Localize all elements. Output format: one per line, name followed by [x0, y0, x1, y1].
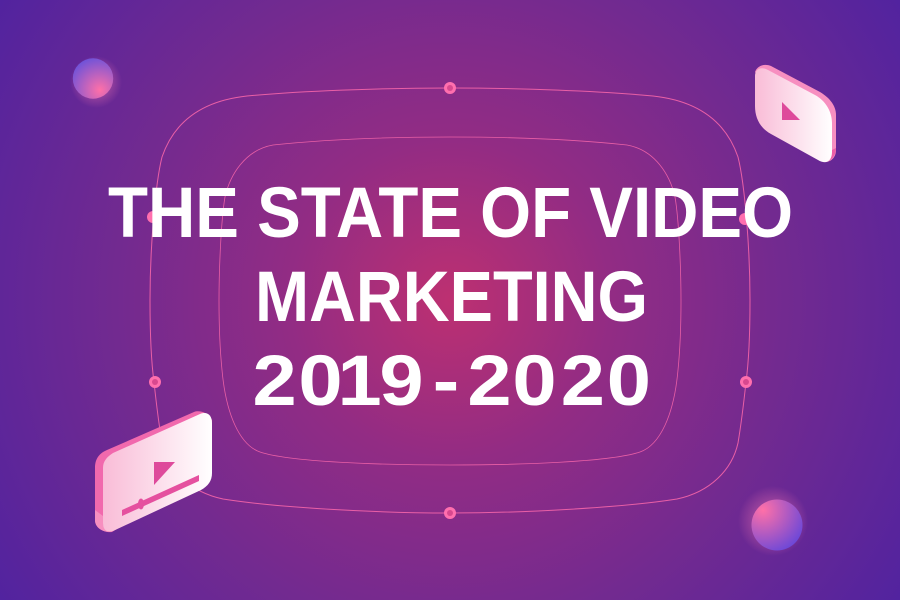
inner rounded frame	[219, 137, 681, 465]
title line 3: 2019-2020	[252, 341, 651, 420]
title line 2: MARKETING	[255, 258, 648, 337]
title	[108, 174, 793, 420]
icon: play button card, top right	[755, 65, 836, 162]
frame node dots	[147, 82, 752, 519]
icon: play triangle	[782, 102, 800, 120]
sphere: bottom right	[738, 486, 808, 556]
sphere: top left	[70, 56, 122, 108]
icon: video player card, bottom left	[95, 411, 212, 532]
outer rounded frame	[150, 88, 750, 513]
icon: play triangle	[154, 462, 175, 485]
icon: progress bar	[122, 475, 199, 516]
title line 1: THE STATE OF VIDEO	[108, 174, 793, 253]
